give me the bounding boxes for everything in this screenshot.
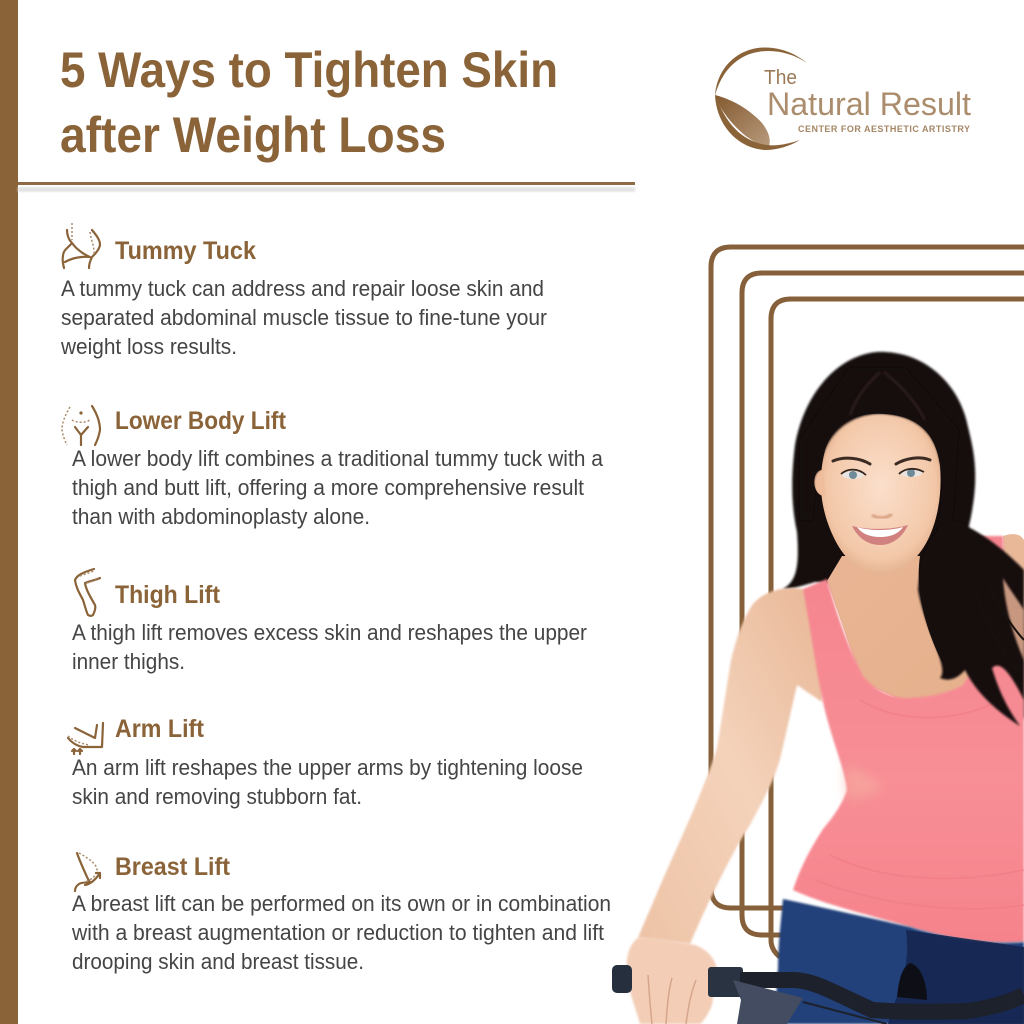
title bbox=[60, 42, 558, 163]
nose shading bbox=[872, 514, 892, 518]
hand on grip bbox=[627, 938, 717, 1024]
face bbox=[821, 414, 941, 575]
eyebrows bbox=[833, 458, 930, 464]
description bbox=[71, 891, 611, 974]
smile bbox=[852, 525, 908, 545]
section: tummy tuck bbox=[60, 223, 547, 359]
description: thigh and butt lift, offering a more comprehensive result bbox=[72, 475, 584, 500]
logo: The Natural Result: The bbox=[764, 67, 797, 89]
logo: The Natural Result: CENTER FOR AESTHETIC ARTISTRY bbox=[798, 124, 970, 134]
logo: The Natural Result: Natural Result bbox=[767, 86, 971, 122]
tank top bbox=[793, 536, 1024, 943]
hair framing the face bbox=[800, 368, 958, 548]
description bbox=[72, 620, 587, 674]
hair parting highlight bbox=[850, 372, 925, 420]
title: after Weight Loss bbox=[60, 107, 446, 163]
left brown sidebar bbox=[0, 0, 18, 1024]
photo: smiling woman on a bicycle bbox=[612, 352, 1024, 1024]
section: arm lift bbox=[68, 715, 583, 809]
description bbox=[72, 755, 583, 809]
description: than with abdominoplasty alone. bbox=[72, 504, 370, 529]
description: drooping skin and breast tissue. bbox=[72, 949, 364, 974]
title: 5 Ways to Tighten Skin bbox=[60, 42, 558, 98]
logo: The Natural Result bbox=[715, 48, 971, 150]
jeans bbox=[776, 899, 1024, 1024]
hair behind bbox=[783, 352, 1024, 724]
description: inner thighs. bbox=[72, 649, 185, 674]
icon: breast profile bbox=[75, 853, 100, 891]
icon: hips bbox=[62, 406, 100, 445]
eyes bbox=[841, 469, 924, 479]
left ear bbox=[814, 470, 826, 496]
handlebar bbox=[612, 965, 1024, 1024]
icon: leg bbox=[75, 569, 100, 616]
heading: Arm Lift bbox=[115, 715, 205, 743]
heading: Tummy Tuck bbox=[115, 237, 256, 265]
left arm bbox=[638, 588, 830, 944]
heading: Breast Lift bbox=[115, 853, 231, 881]
icon: arm bbox=[68, 723, 103, 754]
description: A tummy tuck can address and repair loose skin and bbox=[61, 276, 544, 301]
description bbox=[60, 276, 547, 359]
description bbox=[72, 446, 604, 529]
description: separated abdominal muscle tissue to fine-tune your bbox=[61, 305, 547, 330]
description: A lower body lift combines a traditional tummy tuck with a bbox=[72, 446, 604, 471]
description: weight loss results. bbox=[60, 334, 237, 359]
title divider with shadow bbox=[18, 182, 635, 192]
section: thigh lift bbox=[72, 569, 587, 674]
finger creases bbox=[648, 975, 696, 1024]
description: An arm lift reshapes the upper arms by tightening loose bbox=[72, 755, 583, 780]
description: skin and removing stubborn fat. bbox=[72, 784, 362, 809]
description: A thigh lift removes excess skin and reshapes the upper bbox=[72, 620, 587, 645]
top folds bbox=[815, 700, 1024, 909]
logo ring and leaf bbox=[715, 48, 807, 150]
decorative nested rounded frames bbox=[711, 247, 1024, 957]
section: lower body lift bbox=[62, 406, 604, 529]
description: with a breast augmentation or reduction to tighten and lift bbox=[71, 920, 604, 945]
section: breast lift bbox=[71, 853, 611, 974]
heading: Thigh Lift bbox=[115, 581, 221, 609]
neck and chest bbox=[827, 556, 978, 702]
right shoulder bbox=[1003, 534, 1024, 664]
icon: torso bbox=[63, 223, 100, 268]
blowing hair strands bbox=[918, 520, 1024, 726]
description: A breast lift can be performed on its own or in combination bbox=[72, 891, 611, 916]
peach highlight on top bbox=[846, 765, 885, 800]
saddle bbox=[897, 963, 927, 1000]
heading: Lower Body Lift bbox=[115, 407, 287, 435]
jeans dark shading bbox=[888, 930, 1024, 1024]
